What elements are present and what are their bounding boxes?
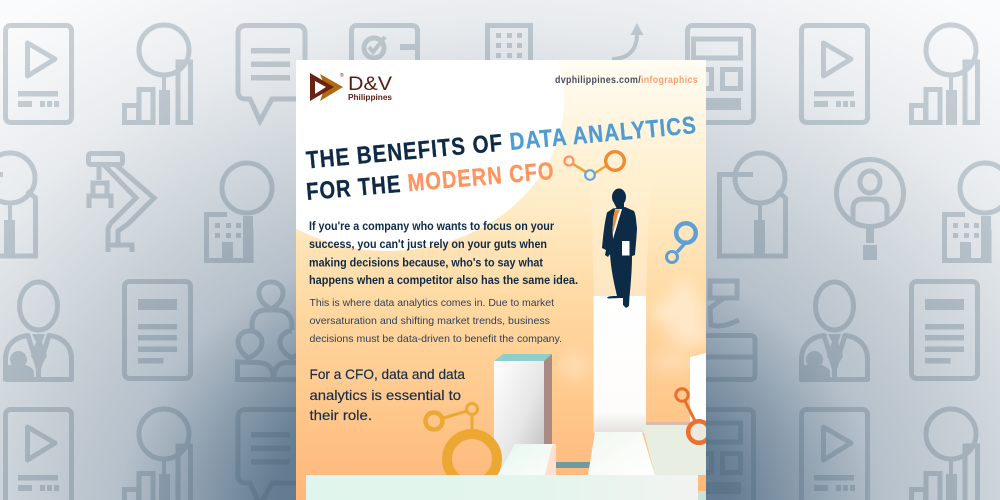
second paragraph (310, 297, 562, 345)
icon: robot arm (88, 154, 154, 252)
second paragraph: oversaturation and shifting market trends, business (310, 315, 550, 327)
CFO statement: For a CFO, data and data (310, 366, 465, 382)
left pillar (494, 354, 552, 475)
icon: speech bubble (238, 26, 305, 121)
icon: checklist (352, 26, 418, 122)
icon: play document (6, 26, 72, 122)
icon: person in suit (799, 282, 868, 381)
clouds (559, 282, 712, 380)
icon: document (124, 282, 190, 378)
light beam behind man (592, 214, 648, 296)
icon: magnifier chart (124, 25, 190, 125)
right pillar (642, 353, 706, 475)
CFO statement: analytics is essential to (310, 387, 461, 403)
chain icon: gold (426, 404, 497, 484)
logo: D&V Philippines: D&V (348, 73, 392, 95)
intro paragraph: happens when a competitor also has the same idea. (309, 275, 578, 287)
website url: dvphilippines.com/infographics (555, 74, 698, 86)
icon: magnifier document (720, 153, 786, 256)
icon: office building (488, 26, 530, 122)
icon: magnifier building (206, 163, 272, 260)
icon: layout page (688, 26, 754, 122)
icon: audience (238, 282, 308, 380)
panel: infographic preview (296, 60, 706, 500)
logo: D&V Philippines (310, 72, 393, 102)
icon: hand with box (700, 281, 755, 380)
bottom card (306, 475, 706, 500)
intro paragraph: making decisions because, who's to say what (309, 258, 543, 270)
second paragraph: This is where data analytics comes in. Due to market (310, 297, 554, 309)
CFO statement: their role. (310, 407, 372, 423)
chain icon: orange (676, 389, 710, 443)
teal base bar (556, 462, 590, 468)
intro paragraph: success, you can't just rely on your guts when (309, 239, 547, 251)
mint block (498, 444, 556, 475)
white curved header area (296, 60, 564, 251)
icon: play document (802, 26, 868, 122)
icon: speech bubble (238, 410, 305, 500)
second paragraph: decisions must be data-driven to benefit the company. (310, 333, 562, 345)
icon: document (912, 282, 978, 378)
main pillar (588, 296, 655, 475)
icon: person in suit (3, 282, 72, 381)
icon: play document (802, 410, 868, 500)
icon: magnifier chart (912, 409, 978, 500)
icon: magnifier document (0, 153, 36, 256)
icon: growth arrow (612, 23, 644, 59)
icon: play document (6, 410, 72, 500)
businessman figure (602, 188, 637, 308)
title: FOR THE MODERN CFO (305, 158, 556, 206)
chain icon: title (564, 152, 624, 180)
logo: D&V Philippines: ® (340, 72, 344, 79)
icon: magnifier chart (912, 25, 978, 125)
logo: D&V Philippines: Philippines (348, 93, 393, 102)
icon: magnifier chart (124, 409, 190, 500)
icon: magnifier building (944, 163, 1000, 260)
title (306, 116, 696, 200)
title: THE BENEFITS OF DATA ANALYTICS (305, 112, 698, 174)
intro paragraph: If you're a company who wants to focus on your (309, 221, 554, 233)
intro paragraph (309, 221, 578, 287)
icon: magnifier person (836, 160, 904, 260)
chain icon: blue (666, 223, 696, 262)
CFO statement (310, 366, 465, 423)
icon: layout page (688, 410, 754, 500)
